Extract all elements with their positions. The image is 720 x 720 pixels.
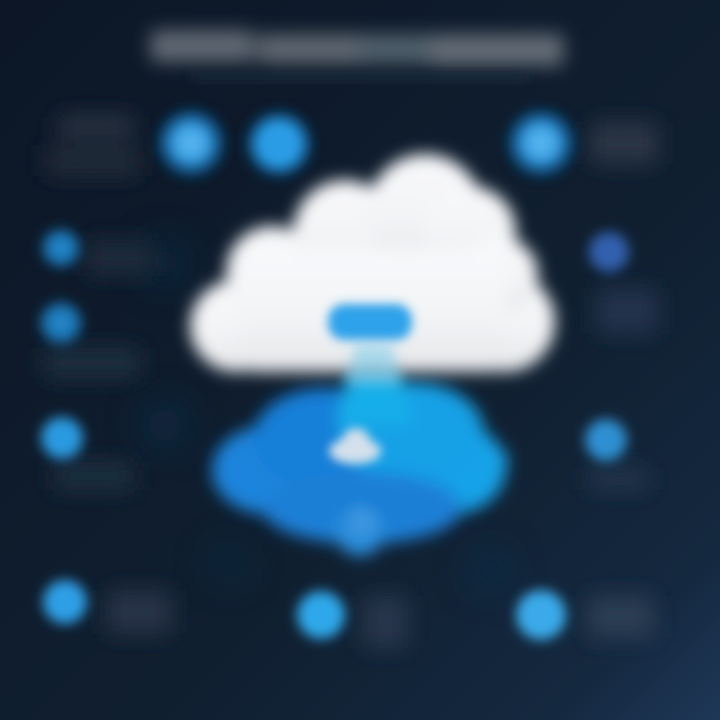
icon: small white cloud inside network xyxy=(329,428,381,464)
icon: bottom center circle xyxy=(297,591,345,639)
icon: left circle 2 xyxy=(40,302,82,344)
subtitle xyxy=(190,72,530,80)
icon: top right circle xyxy=(507,109,575,177)
lower blue network cloud xyxy=(212,370,508,556)
text block: middle left xyxy=(44,348,140,378)
icon: top left circle xyxy=(157,109,225,177)
text block: bottom center xyxy=(362,596,408,648)
icon: right circle 1 xyxy=(589,232,629,272)
text block: bottom left xyxy=(106,590,172,634)
text block: lower right xyxy=(588,468,648,490)
icon: left circle 3 xyxy=(41,417,83,459)
text block: top right xyxy=(590,122,658,164)
soft halo behind the icon ring xyxy=(143,242,508,588)
text block: top left xyxy=(46,116,140,176)
connector glow between clouds xyxy=(345,345,402,385)
title xyxy=(150,30,564,66)
icon: network node bottom xyxy=(349,509,375,535)
upper white cloud xyxy=(190,154,555,372)
icon: bottom left circle xyxy=(43,580,87,624)
text block: bottom right xyxy=(588,596,654,638)
text block: upper right xyxy=(596,288,658,334)
icon: bottom right circle xyxy=(516,590,566,640)
icon: top center circle xyxy=(246,111,312,177)
text block: lower left xyxy=(54,462,134,490)
icon: right circle 2 xyxy=(585,419,627,461)
icon: blue pill on white cloud xyxy=(328,304,412,340)
text block: upper left xyxy=(86,240,152,276)
icon: left circle 1 xyxy=(42,229,80,267)
